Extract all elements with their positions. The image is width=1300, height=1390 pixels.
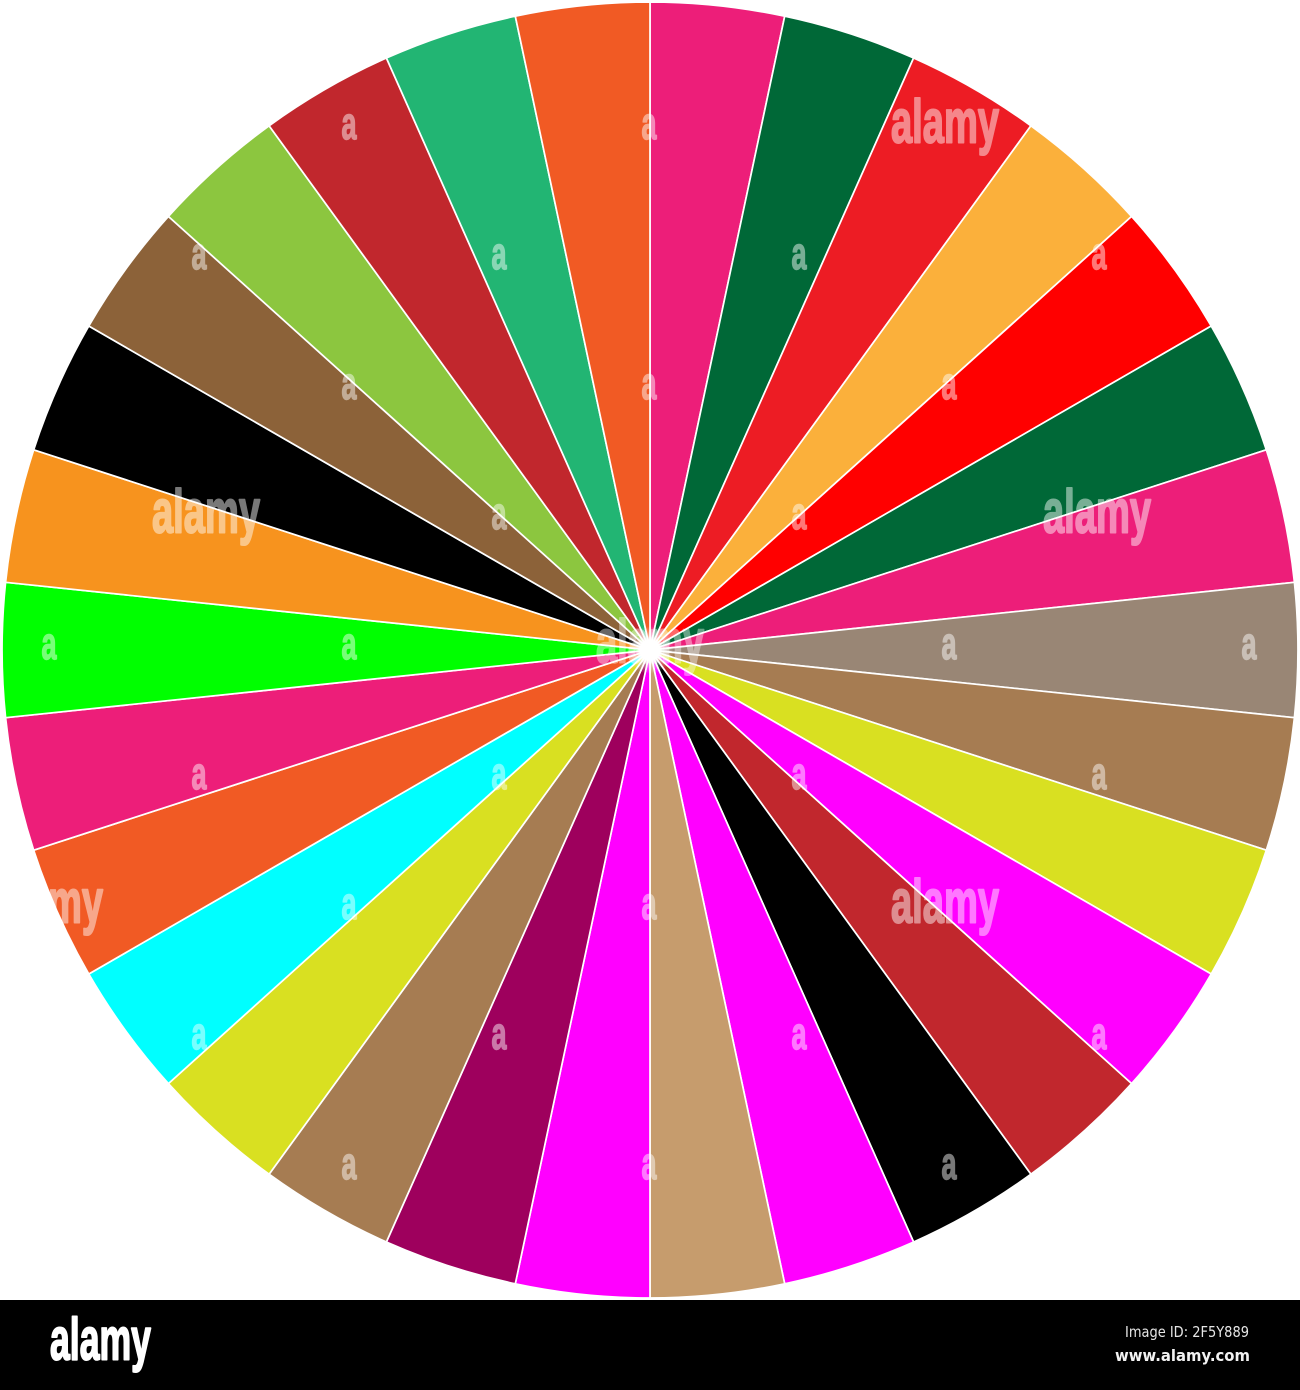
website url: www.alamy.com — [1115, 1346, 1250, 1365]
small watermark letters: a — [792, 748, 807, 799]
small watermark letters: a — [192, 228, 207, 279]
large watermark words: alamy — [152, 478, 260, 546]
slice 21: orange-red — [34, 650, 650, 974]
slice 14: magenta — [650, 650, 914, 1284]
small watermark letters: a — [792, 1008, 807, 1059]
large watermark words: alamy — [0, 868, 103, 936]
large watermark words: alamy — [891, 868, 999, 936]
small watermark letters: a — [642, 358, 657, 409]
slice 30: orange-red — [515, 2, 650, 650]
slice 5: pure red — [650, 216, 1211, 650]
small watermark letters: a — [942, 1138, 957, 1189]
slice 23: bright green — [2, 582, 650, 718]
slice 27: light green — [168, 126, 650, 650]
slice 28: firebrick — [269, 58, 650, 650]
small watermark letters: a — [1092, 1008, 1107, 1059]
small watermark letters: a — [192, 748, 207, 799]
slice 12: firebrick — [650, 650, 1132, 1174]
small watermark letters: a — [942, 358, 957, 409]
slice 6: dark green — [650, 326, 1266, 650]
slice 19: yellow — [168, 650, 650, 1174]
slice 3: red — [650, 58, 1031, 650]
small watermark letters: a — [342, 358, 357, 409]
small watermark letters: a — [342, 618, 357, 669]
small watermark letters: a — [42, 618, 57, 669]
wheel centre white hub — [626, 626, 674, 674]
footer bar — [0, 1300, 1300, 1390]
small watermark letters: a — [492, 1008, 507, 1059]
slice 11: magenta — [650, 650, 1211, 1084]
large watermark words — [0, 88, 1151, 936]
small watermark letters: a — [1092, 748, 1107, 799]
small watermark letters: a — [342, 1138, 357, 1189]
small watermark letters: a — [1242, 618, 1257, 669]
slice 22: pink — [6, 650, 650, 850]
slice 2: dark green — [650, 16, 914, 650]
slice 24: orange — [6, 450, 650, 650]
small watermark letters: a — [642, 878, 657, 929]
small watermark letters — [42, 98, 1257, 1189]
large watermark words: alamy — [891, 88, 999, 156]
slice 20: cyan — [89, 650, 650, 1084]
large watermark words: alamy — [596, 608, 704, 676]
large watermark words: alamy — [1043, 478, 1151, 546]
small watermark letters: a — [492, 488, 507, 539]
slice 18: brown — [269, 650, 650, 1242]
small watermark letters: a — [642, 98, 657, 149]
slice 10: yellow — [650, 650, 1266, 974]
slice 15: tan — [650, 650, 785, 1298]
slice 4: light orange — [650, 126, 1132, 650]
small watermark letters: a — [492, 748, 507, 799]
slice 1: pink — [650, 2, 785, 650]
small watermark letters: a — [342, 98, 357, 149]
slice 9: brown — [650, 650, 1294, 850]
slice 13: black — [650, 650, 1031, 1242]
slice 16: magenta — [515, 650, 650, 1298]
slice 8: taupe — [650, 582, 1298, 718]
slice 29: sea green — [386, 16, 650, 650]
small watermark letters: a — [192, 1008, 207, 1059]
small watermark letters: a — [942, 618, 957, 669]
small watermark letters: a — [342, 878, 357, 929]
image id: Image ID: 2F5Y889 — [1125, 1323, 1249, 1341]
small watermark letters: a — [792, 228, 807, 279]
small watermark letters: a — [492, 228, 507, 279]
slice 25: black — [34, 326, 650, 650]
small watermark letters: a — [1092, 228, 1107, 279]
slice 26: dark brown — [89, 216, 650, 650]
footer logo: alamy — [50, 1306, 151, 1372]
small watermark letters: a — [792, 488, 807, 539]
slice 17: purple — [386, 650, 650, 1284]
small watermark letters: a — [642, 1138, 657, 1189]
slice 7: pink — [650, 450, 1294, 650]
